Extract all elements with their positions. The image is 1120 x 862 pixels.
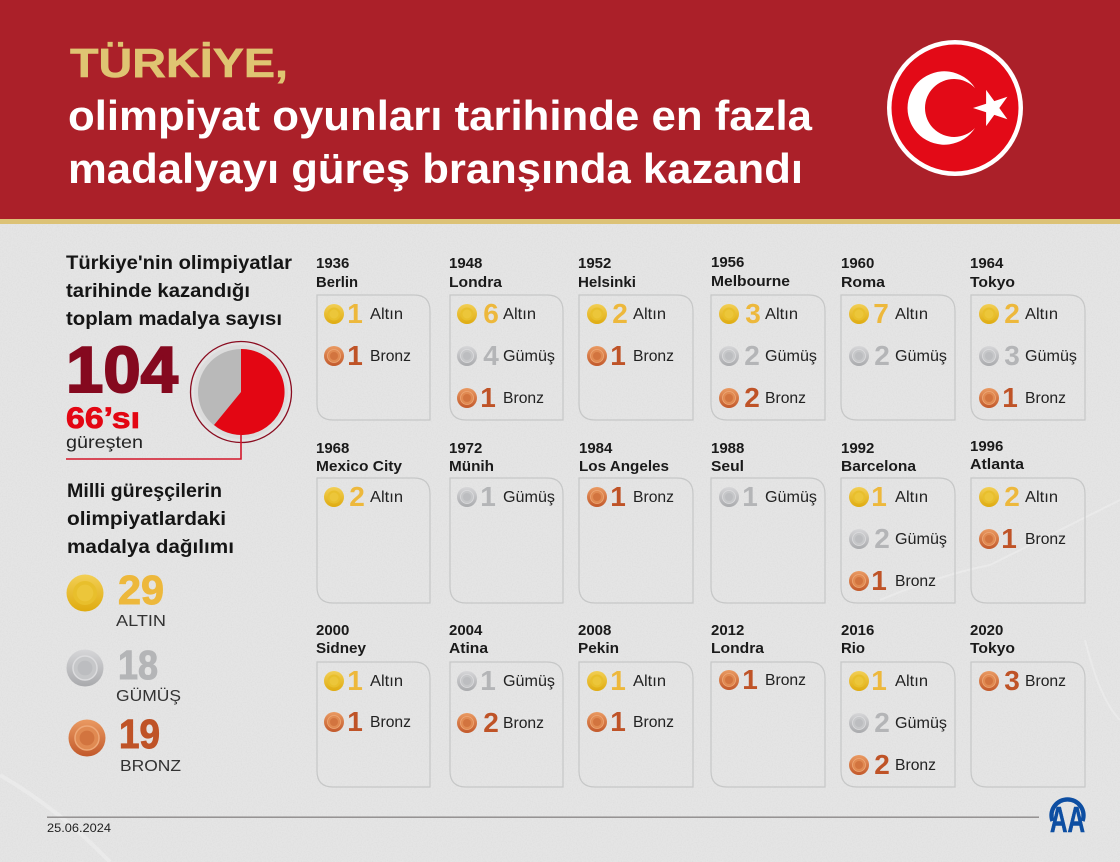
panel: 1972 Münih bbox=[449, 440, 563, 603]
panel: 1952 Helsinki: Bronz bbox=[633, 348, 674, 365]
stat: silver 18: GÜMÜŞ bbox=[116, 687, 181, 705]
panel: 1964 Tokyo: 1964 bbox=[970, 255, 1004, 272]
footer rule bbox=[47, 816, 1039, 818]
panel: 1988 Seul: 1 bbox=[742, 481, 758, 512]
panel: 1996 Atlanta: 2 bbox=[1004, 481, 1020, 512]
panel: 1972 Münih: 1972 bbox=[449, 440, 482, 457]
panel: 1964 Tokyo: 2 bbox=[1004, 298, 1020, 329]
panel: 2000 Sidney: Sidney bbox=[316, 640, 367, 657]
panel: 2012 Londra bbox=[711, 622, 825, 787]
panel: 1996 Atlanta: 1 bbox=[1001, 523, 1017, 554]
panel: 2020 Tokyo bbox=[970, 622, 1085, 787]
stat: bronze 19 bbox=[68, 711, 181, 775]
stat: gold 29 bbox=[66, 567, 166, 630]
panel: 2020 Tokyo: 3 bbox=[1004, 665, 1020, 696]
panel: 2020 Tokyo: Tokyo bbox=[970, 640, 1015, 657]
header banner bbox=[0, 0, 1120, 224]
panel: 2020 Tokyo: Bronz bbox=[1025, 673, 1066, 690]
panel: 1960 Roma: 2 bbox=[874, 340, 890, 371]
panel: 1936 Berlin: 1 bbox=[347, 340, 363, 371]
panel: 1936 Berlin: Altın bbox=[370, 306, 403, 323]
panel: 1964 Tokyo: Altın bbox=[1025, 306, 1058, 323]
panel: 2008 Pekin bbox=[578, 622, 693, 787]
panel: 1992 Barcelona: Bronz bbox=[895, 573, 936, 590]
panel: 1992 Barcelona: Barcelona bbox=[841, 458, 917, 475]
panel: 2008 Pekin: Pekin bbox=[578, 640, 619, 657]
panel: 2004 Atina: Bronz bbox=[503, 715, 544, 732]
panel: 2004 Atina: 2004 bbox=[449, 622, 483, 639]
panel: 1964 Tokyo: 1 bbox=[1002, 382, 1018, 413]
panel: 1964 Tokyo: Tokyo bbox=[970, 274, 1015, 291]
stat: silver 18 bbox=[66, 642, 181, 705]
panel: 1992 Barcelona: Gümüş bbox=[895, 531, 947, 548]
panel: 1956 Melbourne: 2 bbox=[744, 340, 760, 371]
title: madalyayı güreş branşında kazandı bbox=[68, 145, 803, 192]
panel: 1972 Münih: 1 bbox=[480, 481, 496, 512]
panel: 1996 Atlanta: 1996 bbox=[970, 438, 1003, 455]
panel: 2016 Rio: Bronz bbox=[895, 757, 936, 774]
panel: 1984 Los Angeles: 1984 bbox=[579, 440, 613, 457]
panel: 1952 Helsinki: 1952 bbox=[578, 255, 611, 272]
panel: 1996 Atlanta bbox=[970, 438, 1085, 603]
panel: 1996 Atlanta: Atlanta bbox=[970, 456, 1025, 473]
panel: 2004 Atina: Atina bbox=[449, 640, 489, 657]
panel: 1948 Londra: Gümüş bbox=[503, 348, 555, 365]
panel: 2016 Rio: 2 bbox=[874, 707, 890, 738]
panel: 1948 Londra: 1948 bbox=[449, 255, 482, 272]
panel: 2008 Pekin: Bronz bbox=[633, 714, 674, 731]
panel: 1952 Helsinki: 1 bbox=[610, 340, 626, 371]
panel: 2008 Pekin: Altın bbox=[633, 673, 666, 690]
panel: 1992 Barcelona: 2 bbox=[874, 523, 890, 554]
panel: 1988 Seul: Gümüş bbox=[765, 489, 817, 506]
title: olimpiyat oyunları tarihinde en fazla bbox=[68, 92, 813, 139]
panel: 2000 Sidney: Altın bbox=[370, 673, 403, 690]
panel: 2000 Sidney: 1 bbox=[347, 665, 363, 696]
panel: 2016 Rio: 2 bbox=[874, 749, 890, 780]
panel: 1968 Mexico City: Mexico City bbox=[316, 458, 403, 475]
panel: 1964 Tokyo: 3 bbox=[1004, 340, 1020, 371]
panel: 1952 Helsinki bbox=[578, 255, 693, 420]
panel: 1992 Barcelona: 1 bbox=[871, 565, 887, 596]
icon: Turkish flag bbox=[887, 40, 1023, 176]
panel: 1956 Melbourne bbox=[711, 254, 825, 420]
panel: 1936 Berlin: 1 bbox=[347, 298, 363, 329]
panel: 1948 Londra: 6 bbox=[483, 298, 499, 329]
panel: 1988 Seul: 1988 bbox=[711, 440, 744, 457]
panel: 1948 Londra: Altın bbox=[503, 306, 536, 323]
panel: 2008 Pekin: 1 bbox=[610, 706, 626, 737]
panel: 1948 Londra: 4 bbox=[483, 340, 499, 371]
panel: 2008 Pekin: 1 bbox=[610, 665, 626, 696]
panel: 1948 Londra: Bronz bbox=[503, 390, 544, 407]
panel: 1964 Tokyo: Gümüş bbox=[1025, 348, 1077, 365]
panel: 1968 Mexico City: 1968 bbox=[316, 440, 349, 457]
panel: 1968 Mexico City: 2 bbox=[349, 481, 365, 512]
panel: 1960 Roma: Altın bbox=[895, 306, 928, 323]
pie chart: 66 of 104 bbox=[66, 342, 292, 459]
panel: 1936 Berlin bbox=[316, 255, 430, 420]
logo: AA: AA bbox=[1050, 799, 1085, 840]
wrestling count 66'sı: 66’sı bbox=[66, 402, 140, 435]
panel: 2012 Londra: 2012 bbox=[711, 622, 744, 639]
panel: 2016 Rio bbox=[841, 622, 955, 787]
panel: 1960 Roma: Roma bbox=[841, 274, 886, 291]
heading: medal distribution: olimpiyatlardaki bbox=[67, 508, 226, 530]
panel: 1936 Berlin: Bronz bbox=[370, 348, 411, 365]
panel: 1984 Los Angeles: 1 bbox=[610, 481, 626, 512]
panel: 1964 Tokyo bbox=[970, 255, 1085, 420]
title bbox=[68, 40, 813, 192]
panel: 1992 Barcelona: 1 bbox=[871, 481, 887, 512]
date: 25.06.2024 bbox=[47, 821, 111, 835]
panel: 1952 Helsinki: 2 bbox=[612, 298, 628, 329]
panel: 2008 Pekin: 2008 bbox=[578, 622, 611, 639]
panel: 1996 Atlanta: Bronz bbox=[1025, 531, 1066, 548]
heading: medal distribution: madalya dağılımı bbox=[67, 536, 234, 558]
heading: total medals: Türkiye'nin olimpiyatlar bbox=[66, 252, 292, 274]
panel: 1984 Los Angeles bbox=[579, 440, 693, 603]
panel: 1956 Melbourne: Melbourne bbox=[711, 273, 790, 290]
panel: 1956 Melbourne: 3 bbox=[745, 298, 761, 329]
panel: 1992 Barcelona bbox=[841, 440, 955, 603]
panel: 1960 Roma: 7 bbox=[873, 298, 889, 329]
panel: 2000 Sidney: Bronz bbox=[370, 714, 411, 731]
logo: AA bbox=[1050, 799, 1085, 840]
stat: silver 18: 18 bbox=[118, 642, 158, 688]
panel: 1992 Barcelona: Altın bbox=[895, 489, 928, 506]
title: TÜRKİYE, bbox=[70, 40, 288, 86]
stat: bronze 19: 19 bbox=[119, 711, 160, 757]
panel: 1968 Mexico City: Altın bbox=[370, 489, 403, 506]
panel: 2016 Rio: Gümüş bbox=[895, 715, 947, 732]
panel: 1936 Berlin: Berlin bbox=[316, 274, 358, 291]
panel: 1984 Los Angeles: Los Angeles bbox=[579, 458, 669, 475]
panel: 1956 Melbourne: Altın bbox=[765, 306, 798, 323]
panel: 1952 Helsinki: Helsinki bbox=[578, 274, 636, 291]
panel: 2004 Atina: Gümüş bbox=[503, 673, 555, 690]
panel: 1992 Barcelona: 1992 bbox=[841, 440, 874, 457]
panel: 1960 Roma: 1960 bbox=[841, 255, 874, 272]
panel: 1948 Londra bbox=[449, 255, 563, 420]
panel: 1960 Roma bbox=[841, 255, 955, 420]
panel: 2000 Sidney bbox=[316, 622, 430, 787]
panel: 2016 Rio: Rio bbox=[841, 640, 865, 657]
panel: 1948 Londra: Londra bbox=[449, 274, 503, 291]
stat: gold 29: 29 bbox=[118, 567, 164, 613]
panel: 1956 Melbourne: Bronz bbox=[765, 390, 806, 407]
stat: gold 29: ALTIN bbox=[116, 613, 166, 630]
panel: 2016 Rio: Altın bbox=[895, 673, 928, 690]
panel: 2004 Atina: 2 bbox=[483, 707, 499, 738]
panel: 1964 Tokyo: Bronz bbox=[1025, 390, 1066, 407]
label: güreşten: güreşten bbox=[66, 432, 143, 452]
stat: bronze 19: BRONZ bbox=[120, 758, 181, 775]
total number 104: 104 bbox=[66, 333, 178, 406]
panel: 1936 Berlin: 1936 bbox=[316, 255, 349, 272]
panel: 2016 Rio: 2016 bbox=[841, 622, 874, 639]
panel: 1984 Los Angeles: Bronz bbox=[633, 489, 674, 506]
panel: 1956 Melbourne: 2 bbox=[744, 382, 760, 413]
panel: 1968 Mexico City bbox=[316, 440, 430, 603]
panel: 2012 Londra: Londra bbox=[711, 640, 765, 657]
panel: 1948 Londra: 1 bbox=[480, 382, 496, 413]
panel: 2004 Atina bbox=[449, 622, 563, 787]
panel: 1956 Melbourne: 1956 bbox=[711, 254, 744, 271]
panel: 1988 Seul: Seul bbox=[711, 458, 744, 475]
panel: 1996 Atlanta: Altın bbox=[1025, 489, 1058, 506]
panel: 1956 Melbourne: Gümüş bbox=[765, 348, 817, 365]
panel: 2004 Atina: 1 bbox=[480, 665, 496, 696]
panel: 2000 Sidney: 1 bbox=[347, 706, 363, 737]
panel: 2016 Rio: 1 bbox=[871, 665, 887, 696]
panel: 1972 Münih: Münih bbox=[449, 458, 494, 475]
panel: 2000 Sidney: 2000 bbox=[316, 622, 349, 639]
panel: 1988 Seul bbox=[711, 440, 825, 603]
panel: 1952 Helsinki: Altın bbox=[633, 306, 666, 323]
panel: 2012 Londra: Bronz bbox=[765, 672, 806, 689]
heading: total medals: tarihinde kazandığı bbox=[66, 280, 250, 302]
heading: total medals: toplam madalya sayısı bbox=[66, 308, 282, 330]
panel: 1960 Roma: Gümüş bbox=[895, 348, 947, 365]
panel: 2020 Tokyo: 2020 bbox=[970, 622, 1003, 639]
panel: 1972 Münih: Gümüş bbox=[503, 489, 555, 506]
panel: 2012 Londra: 1 bbox=[742, 664, 758, 695]
heading: medal distribution: Milli güreşçilerin bbox=[67, 480, 222, 502]
